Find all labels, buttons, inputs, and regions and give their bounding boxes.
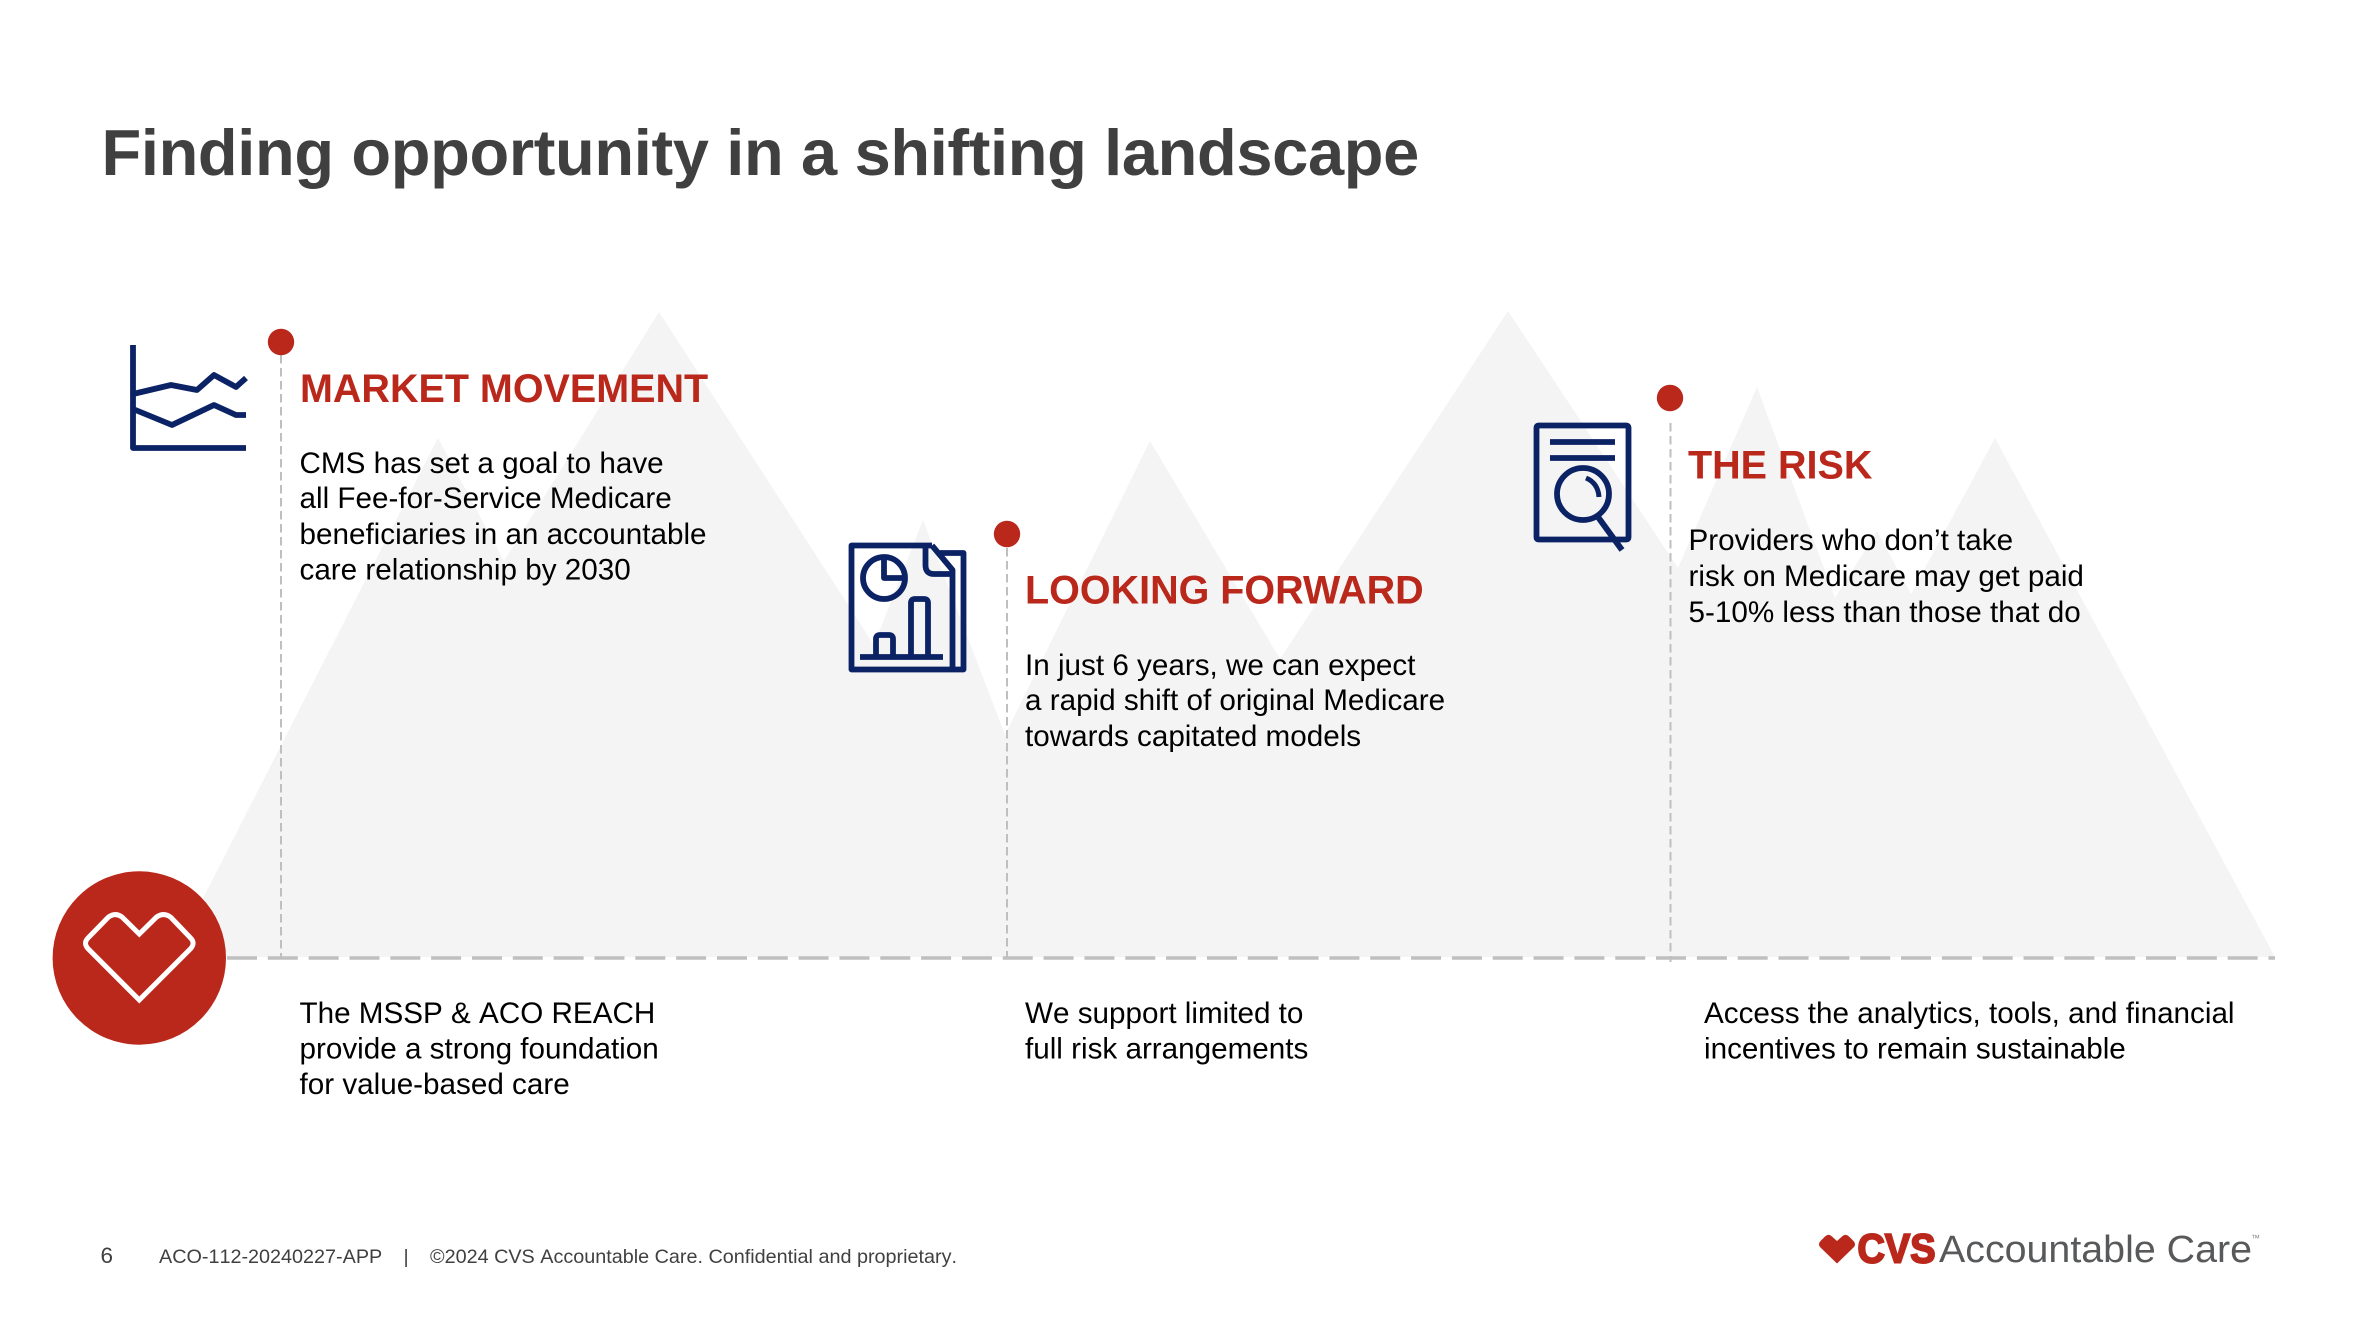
- text block: foundation support: The MSSP & ACO REACH: [300, 997, 655, 1030]
- text block: market movement: care relationship by 2030: [300, 554, 631, 586]
- heading: looking forward: LOOKING FORWARD: [1025, 568, 1424, 612]
- panel: looking forward: [852, 521, 1445, 957]
- text block: looking forward: towards capitated models: [1025, 720, 1361, 753]
- text block: looking forward: a rapid shift of original Medicare: [1025, 684, 1445, 717]
- logo: CVS Accountable Care: [1819, 1226, 2260, 1272]
- icon: report document with charts: [852, 546, 964, 670]
- text block: risk arrangements support: We support limited to: [1025, 997, 1303, 1030]
- icon: document with magnifying glass: [1536, 426, 1628, 550]
- text block: foundation support: [300, 997, 659, 1101]
- text block: foundation support: for value-based care: [300, 1068, 570, 1101]
- text block: foundation support: provide a strong foundation: [300, 1032, 659, 1066]
- text block: the risk: Providers who don’t take: [1688, 524, 2013, 557]
- marker dot and stem: looking forward: [994, 521, 1020, 957]
- text block: market movement: [300, 447, 707, 586]
- marker dot and stem: the risk: [1657, 385, 1683, 962]
- text block: analytics and incentives support: [1704, 997, 2235, 1066]
- logo: CVS Accountable Care: Accountable Care: [1939, 1229, 2252, 1271]
- panel: the risk: [1536, 385, 2084, 962]
- panel: market movement: [133, 329, 708, 957]
- footer: page number and copyright: ACO-112-20240227-APP: [159, 1246, 382, 1268]
- text block: market movement: all Fee-for-Service Medicare: [300, 482, 672, 515]
- text block: market movement: beneficiaries in an accountable: [300, 518, 707, 551]
- mountain range background: [173, 311, 2275, 957]
- text block: risk arrangements support: full risk arrangements: [1025, 1032, 1308, 1066]
- text block: analytics and incentives support: incentives to remain sustainable: [1704, 1032, 2126, 1066]
- logo: CVS Accountable Care: CVS: [1858, 1226, 1936, 1272]
- text block: analytics and incentives support: Access the analytics, tools, and financial: [1704, 997, 2235, 1030]
- text block: the risk: 5-10% less than those that do: [1688, 596, 2081, 629]
- text block: the risk: risk on Medicare may get paid: [1688, 560, 2084, 593]
- heading: market movement: MARKET MOVEMENT: [300, 367, 708, 411]
- marker dot and stem: market movement: [268, 329, 294, 957]
- text block: market movement: CMS has set a goal to have: [300, 447, 664, 480]
- text block: looking forward: [1025, 649, 1445, 753]
- text block: looking forward: In just 6 years, we can expect: [1025, 649, 1416, 682]
- footer: page number and copyright: 6: [100, 1243, 113, 1268]
- footer: page number and copyright: ©2024 CVS Accountable Care. Confidential and proprietary.: [430, 1246, 957, 1268]
- heading: the risk: THE RISK: [1688, 444, 1873, 488]
- icon: red circle with heart: [53, 871, 226, 1045]
- title: Finding opportunity in a shifting landscape: [102, 116, 1419, 189]
- footer: page number and copyright: [100, 1243, 957, 1268]
- timeline dashed baseline: [227, 956, 2275, 960]
- icon: line chart: [133, 345, 246, 448]
- text block: risk arrangements support: [1025, 997, 1308, 1066]
- logo: CVS Accountable Care: ™: [2251, 1233, 2260, 1243]
- text block: the risk: [1688, 524, 2084, 629]
- footer: page number and copyright: |: [404, 1246, 409, 1268]
